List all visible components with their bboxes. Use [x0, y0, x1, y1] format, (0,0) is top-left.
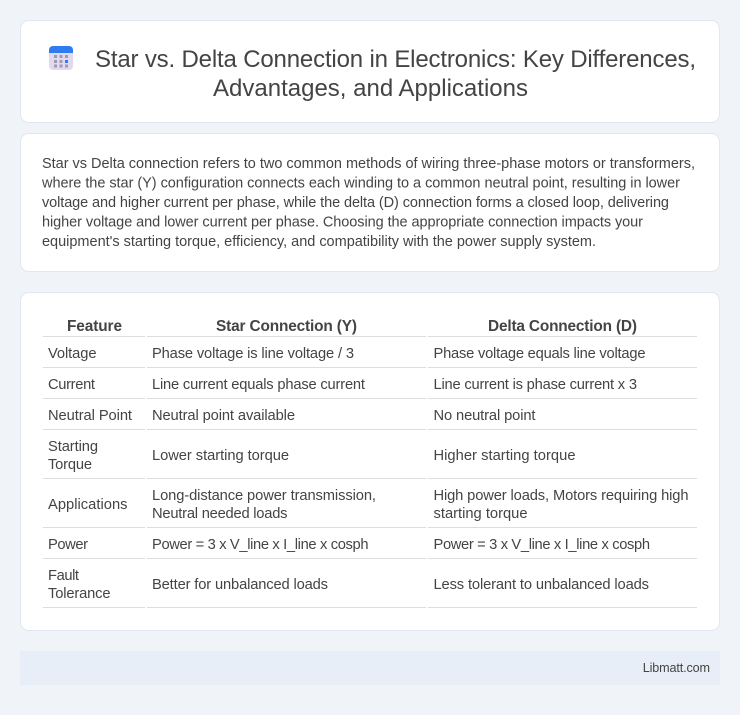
row: fault tolerance: Tolerance — [48, 586, 110, 602]
summary text — [41, 156, 695, 250]
row: voltage: Phase voltage equals line voltage — [434, 346, 646, 362]
summary text: where the star (Y) configuration connects each winding to a common neutral point, resulting in lower — [41, 176, 680, 192]
row: voltage: Voltage — [48, 346, 96, 362]
table header row — [67, 318, 637, 335]
row: applications — [48, 488, 688, 522]
summary text: voltage and higher current per phase, while the delta (D) connection forms a closed loop, delivering — [42, 195, 669, 211]
row: fault tolerance: Better for unbalanced loads — [152, 577, 328, 593]
summary text: higher voltage and lower current per phase. Choosing the appropriate connection impacts your — [42, 214, 643, 230]
row: current — [48, 377, 637, 393]
row: current: Line current equals phase current — [152, 377, 365, 393]
row: starting torque — [48, 439, 576, 473]
row: starting torque: Higher starting torque — [434, 448, 576, 464]
footer credit: Libmatt.com — [643, 661, 710, 675]
row: applications: Neutral needed loads — [152, 506, 288, 522]
header panel — [20, 20, 720, 122]
row: fault tolerance — [48, 568, 649, 602]
row: power — [48, 537, 650, 553]
row: starting torque: Starting — [48, 439, 98, 455]
row: current: Current — [48, 377, 95, 393]
row: power: Power = 3 x V_line x I_line x cosph — [434, 537, 650, 553]
icon: calendar — [49, 46, 73, 70]
table header row: Delta Connection (D) — [488, 318, 637, 335]
title: Star vs. Delta Connection in Electronics: Key Differences, — [95, 46, 696, 73]
row: neutral point: No neutral point — [434, 408, 536, 424]
title: Advantages, and Applications — [213, 75, 528, 102]
row: power: Power — [48, 537, 88, 553]
comparison table panel — [20, 292, 720, 630]
row: neutral point — [48, 408, 536, 424]
row: starting torque: Torque — [48, 457, 92, 473]
row: current: Line current is phase current x 3 — [434, 377, 637, 393]
row: neutral point: Neutral Point — [48, 408, 132, 424]
row: applications: Applications — [48, 497, 128, 513]
row: neutral point: Neutral point available — [152, 408, 295, 424]
row: applications: starting torque — [434, 506, 528, 522]
row: voltage — [48, 346, 646, 362]
row: applications: Long-distance power transmission, — [152, 488, 376, 504]
table header row: Feature — [67, 318, 122, 335]
summary panel — [20, 134, 720, 272]
row: fault tolerance: Fault — [48, 568, 79, 584]
row: power: Power = 3 x V_line x I_line x cosph — [152, 537, 368, 553]
row: voltage: Phase voltage is line voltage / 3 — [152, 346, 354, 362]
row: fault tolerance: Less tolerant to unbalanced loads — [434, 577, 649, 593]
summary text: equipment's starting torque, efficiency, and compatibility with the power supply system. — [42, 234, 596, 250]
row: applications: High power loads, Motors requiring high — [434, 488, 688, 504]
footer bar — [20, 651, 720, 685]
row: starting torque: Lower starting torque — [152, 448, 289, 464]
summary text: Star vs Delta connection refers to two common methods of wiring three-phase motors or transformers, — [42, 156, 695, 172]
table header row: Star Connection (Y) — [216, 318, 357, 335]
title — [95, 46, 696, 102]
